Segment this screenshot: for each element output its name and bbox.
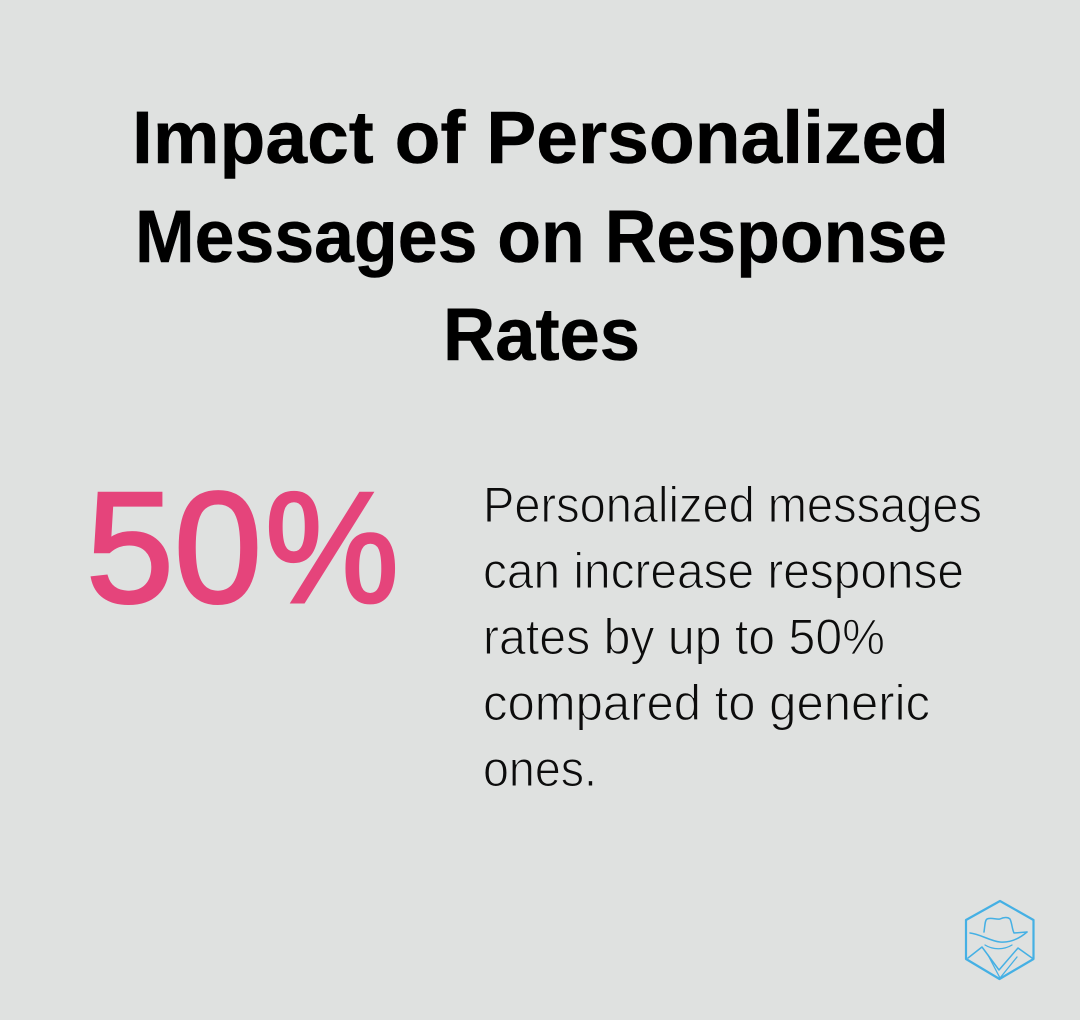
description text: ones. [483,741,597,797]
title: Rates [443,293,640,376]
title: Messages on Response [135,195,947,278]
description text: rates by up to 50% [483,609,885,665]
big statistic: 50%: 5 [86,460,174,636]
big statistic: 50%: 0 [174,460,262,636]
description text: compared to generic [483,675,930,731]
big statistic: 50% [86,460,399,636]
description text: Personalized messages [483,477,982,533]
description text: can increase response [483,543,964,599]
description text [483,477,982,797]
big statistic: 50%: % [265,460,399,636]
title [132,96,949,376]
icon: spy logo in hexagon [966,901,1034,979]
title: Impact of Personalized [132,96,949,179]
